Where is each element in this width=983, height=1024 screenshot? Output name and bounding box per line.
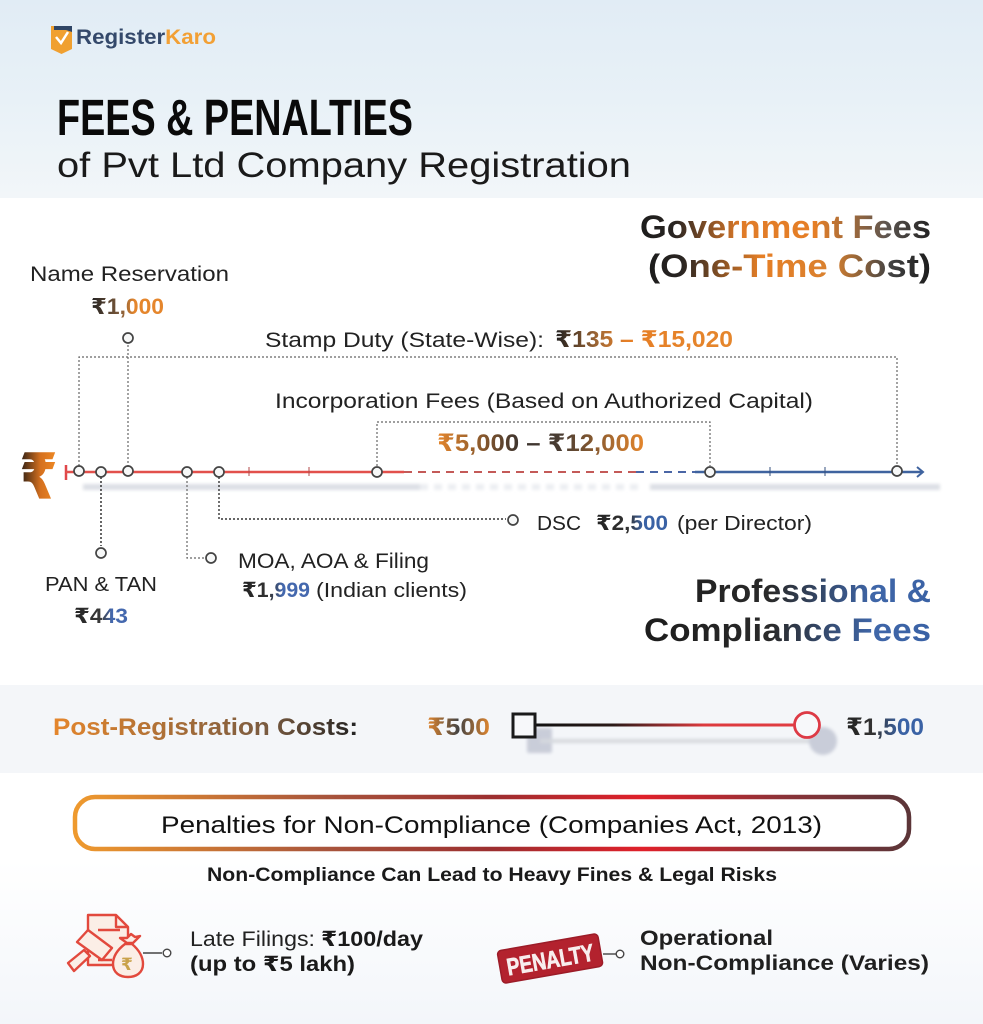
icon: logo shield [51, 26, 72, 54]
banner: penalties for non-compliance [75, 797, 909, 849]
value: 1500: ₹1,500 [846, 714, 924, 741]
label: post-registration costs: Post-Registration Costs: [53, 714, 358, 741]
label: incorporation fees [275, 390, 813, 457]
label: name reservation [30, 263, 229, 319]
label: PAN and TAN [45, 574, 157, 628]
label: DSC: ₹2,500 [596, 512, 668, 535]
timeline axis [66, 465, 923, 480]
label: name reservation: ₹1,000 [91, 294, 164, 319]
icon: gavel document and money bag [68, 915, 143, 977]
label: MOA, AOA and filing: ₹1,999 [242, 579, 310, 602]
text: operational non-compliance [640, 927, 929, 975]
text: late filings: (up to ₹5 lakh) [190, 953, 355, 976]
label: incorporation fees: Incorporation Fees (Based on Authorized Capital) [275, 390, 813, 413]
heading: professional and compliance fees: Professional & [695, 573, 931, 609]
label: incorporation fees: ₹5,000 – ₹12,000 [437, 430, 644, 457]
label: stamp duty [265, 326, 733, 352]
heading: professional and compliance fees: Compliance Fees [644, 612, 931, 648]
label: MOA, AOA and filing: MOA, AOA & Filing [238, 550, 429, 573]
logo wordmark: RegisterKaro [76, 26, 216, 49]
icon: rupee symbol: ₹ [20, 443, 57, 512]
banner: penalties for non-compliance: Penalties for Non-Compliance (Companies Act, 2013) [161, 812, 822, 839]
text: operational non-compliance: Operational [640, 927, 773, 950]
subheading: non-compliance warning: Non-Compliance Can Lead to Heavy Fines & Legal Risks [207, 865, 777, 886]
subheading: of Pvt Ltd Company Registration [57, 146, 631, 185]
heading: fees and penalties: FEES & PENALTIES [57, 89, 413, 146]
connector: gavel icon [143, 949, 171, 957]
heading: government fees [640, 209, 931, 284]
text: operational non-compliance: Non-Compliance (Varies) [640, 952, 929, 975]
text: late filings [190, 928, 423, 976]
slider shadow [527, 727, 837, 755]
label: PAN and TAN: ₹443 [74, 605, 128, 628]
timeline shadow [83, 484, 940, 490]
label: name reservation: Name Reservation [30, 263, 229, 286]
dotted connectors [79, 345, 897, 558]
label: MOA, AOA and filing: (Indian clients) [316, 580, 467, 602]
text: late filings: Late Filings: [190, 928, 315, 951]
label: stamp duty: ₹135 – ₹15,020 [555, 326, 733, 352]
value: 500: ₹500 [427, 714, 490, 741]
label: MOA, AOA and filing [238, 550, 467, 602]
label: DSC: DSC [537, 513, 581, 535]
connector: penalty icon [603, 950, 624, 958]
label: stamp duty: Stamp Duty (State-Wise): [265, 329, 544, 352]
title [57, 89, 631, 185]
panel: post-registration costs [53, 712, 924, 755]
text: late filings: ₹100/day [321, 928, 423, 951]
heading: government fees: Government Fees [640, 209, 931, 245]
icon: gavel document and money bag: ₹ [121, 955, 133, 974]
label: PAN and TAN: PAN & TAN [45, 574, 157, 596]
label: DSC: (per Director) [677, 513, 812, 535]
heading: government fees: (One-Time Cost) [648, 248, 931, 284]
slider [513, 712, 820, 738]
timeline nodes [74, 333, 902, 563]
logo: RegisterKaro [51, 26, 216, 54]
icon: penalty stamp: PENALTY [505, 940, 596, 981]
heading: professional and compliance fees [644, 573, 931, 648]
label: DSC [537, 512, 812, 535]
